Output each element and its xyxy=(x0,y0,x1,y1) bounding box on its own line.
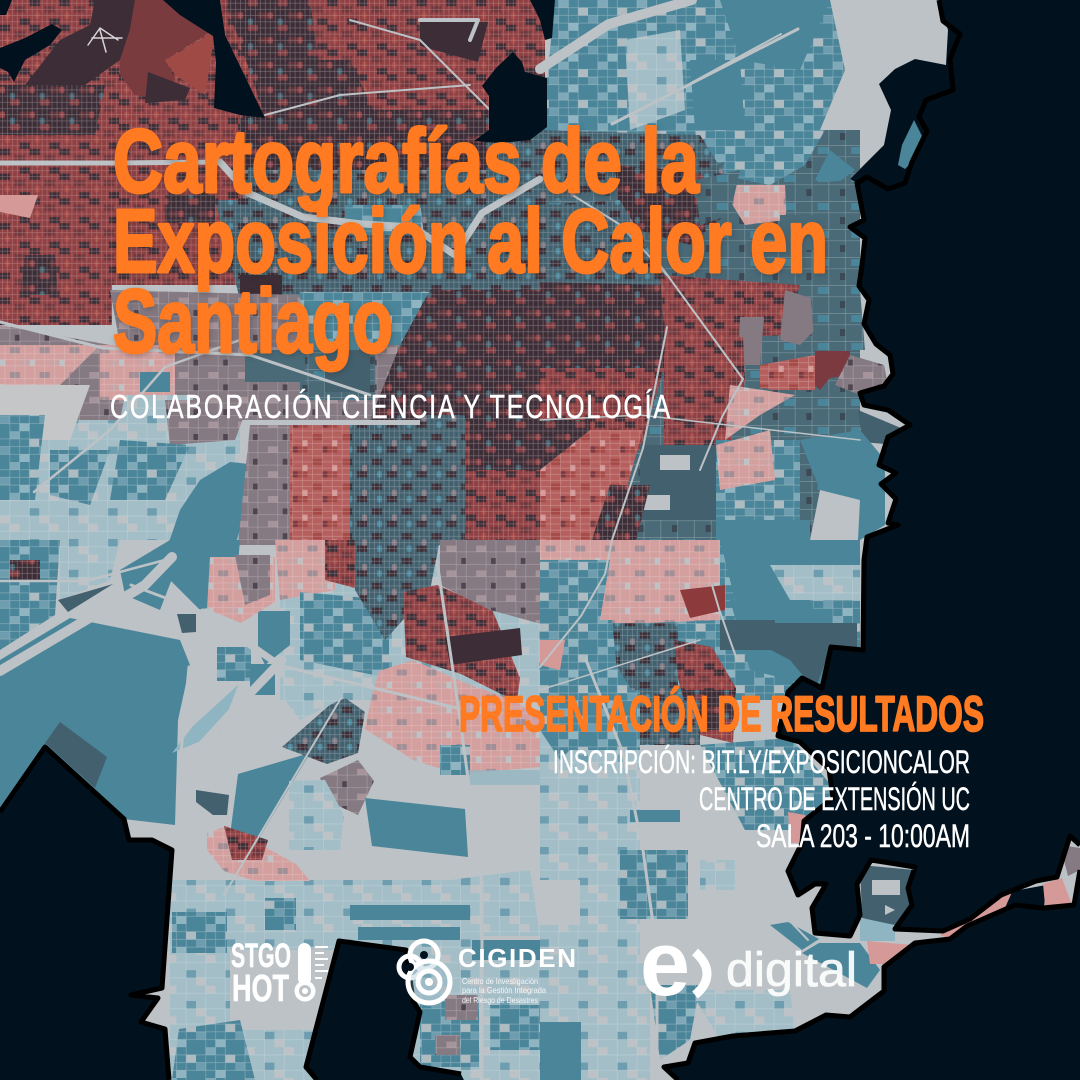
west and southwest central zones xyxy=(0,395,545,545)
logo: STGO HOT: STGO xyxy=(231,937,291,975)
title: Exposición al Calor en xyxy=(113,192,828,292)
northeast cool zones xyxy=(540,0,860,290)
title: Cartografías de la xyxy=(113,112,700,212)
organization description: para la Gestión Integrada xyxy=(462,985,546,995)
main roads and river xyxy=(0,0,860,1080)
organization description: del Riesgo de Desastres xyxy=(462,995,538,1005)
southern periphery zones xyxy=(172,870,540,1080)
title xyxy=(113,112,828,372)
inner dark voids xyxy=(0,0,555,143)
southeast central zones xyxy=(540,540,915,1080)
title: Santiago xyxy=(113,272,393,372)
logo: STGO HOT: HOT xyxy=(232,968,289,1010)
teal pocket at east boundary xyxy=(898,120,922,169)
central mixed zones xyxy=(0,200,545,440)
logo: CIGIDEN xyxy=(399,941,576,1005)
icon: logo parenthesis xyxy=(695,952,707,995)
logo: e) digital: e xyxy=(640,913,690,1015)
subtitle: COLABORACIÓN CIENCIA Y TECNOLOGÍA xyxy=(110,389,671,426)
south central zones xyxy=(0,540,545,881)
east central hot zones xyxy=(540,275,901,545)
event details xyxy=(553,744,970,854)
icon: concentric circles xyxy=(399,941,450,1003)
logo: STGO HOT xyxy=(231,937,328,1010)
organization description: Centro de Investigación xyxy=(462,976,538,986)
logo: CIGIDEN: CIGIDEN xyxy=(458,943,576,973)
backfill tones xyxy=(0,0,860,1080)
east sliver xyxy=(940,845,1080,939)
logo: e) digital: digital xyxy=(726,944,857,997)
northwest hot zones xyxy=(0,0,490,370)
event details: SALA 203 - 10:00AM xyxy=(756,818,970,854)
logo: e) digital xyxy=(640,913,857,1015)
icon: thermometer xyxy=(294,943,328,1002)
organization description xyxy=(462,976,546,1005)
